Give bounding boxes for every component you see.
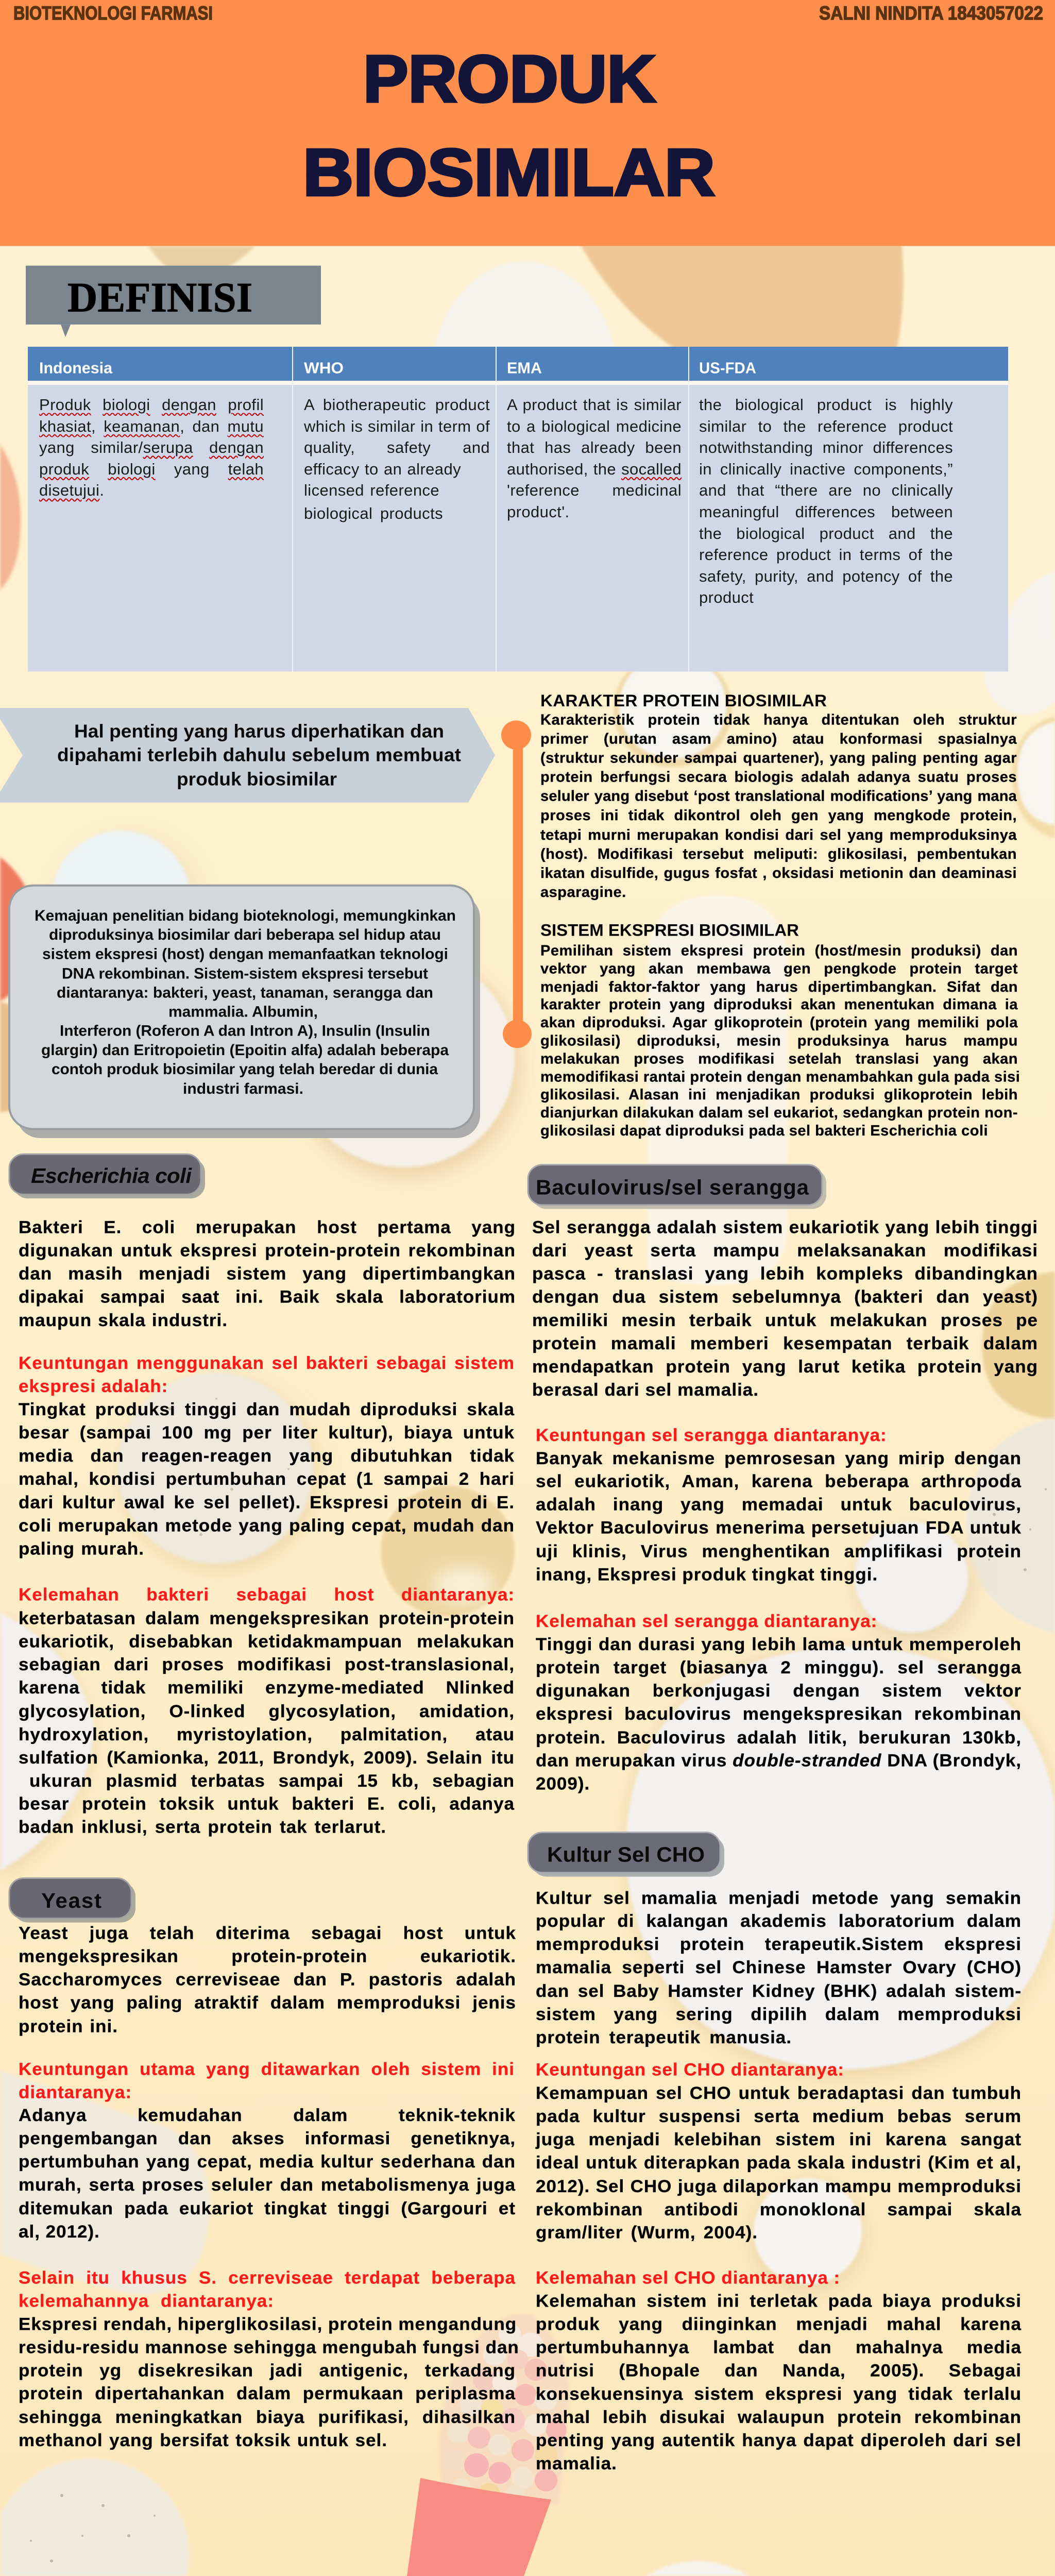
definition: EMA: A product that is similar [507,396,682,414]
pill: kultur sel CHO [528,1833,724,1877]
intro callout box: industri farmasi. [183,1081,303,1097]
text: sistem ekspresi biosimilar: melakukan proses modifikasi setelah translasi yang akan [540,1051,1018,1067]
text: kelemahan bakteri: sulfation (Kamionka, 2011, Brondyk, 2009). Selain itu [19,1748,515,1768]
text: baculovirus intro: memiliki mesin terbaik untuk melakukan proses pe [532,1311,1038,1330]
heading: keuntungan sel bakteri: ekspresi adalah: [19,1377,168,1396]
text: karakter protein biosimilar: proses ini tidak dikontrol oleh gen yang mengkode protein, [540,808,1017,824]
definition: WHO: which is similar in term of [304,417,490,435]
pill: baculovirus: Baculovirus/sel serangga [536,1175,809,1199]
text: keuntungan sel serangga: Banyak mekanisme pemrosesan yang mirip dengan [536,1449,1022,1468]
intro callout box: Kemajuan penelitian bidang bioteknologi, memungkinkan [35,908,456,924]
heading: keuntungan sel serangga: Keuntungan sel serangga diantaranya: [536,1426,887,1445]
text: keuntungan sel bakteri: paling murah. [19,1539,144,1558]
text: keuntungan yeast: pertumbuhan yang cepat, media kultur sederhana dan [19,2152,516,2172]
text: sistem ekspresi biosimilar: karakter protein yang diproduksi akan menentukan dimana ia [540,997,1018,1013]
text: karakter protein biosimilar: tetapi murni merupakan kondisi dari sel yang memproduksinya [540,827,1017,843]
arrow banner: dipahami terlebih dahulu sebelum membuat [57,744,461,765]
heading: keuntungan yeast: Keuntungan utama yang ditawarkan oleh sistem ini [19,2059,515,2079]
definition: US-FDA: safety, purity, and potency of the [699,567,953,585]
definition: US-FDA: and that “there are no clinically [699,482,953,499]
text: keuntungan yeast: ditemukan pada eukariot tingkat tinggi (Gargouri et [19,2198,516,2218]
text: sistem ekspresi biosimilar [540,943,1020,1139]
text: kelemahan sel CHO: konsekuensinya sistem ekspresi yang tidak terlalu [536,2384,1022,2404]
heading: karakter protein: KARAKTER PROTEIN BIOSIMILAR [540,691,827,710]
text: yeast intro [19,1923,516,2036]
text: kelemahan bakteri: keterbatasan dalam mengekspresikan protein-protein [19,1608,515,1628]
text: karakter protein biosimilar: primer (urutan asam amino) atau konformasi spasialnya [540,731,1017,747]
text: kultur sel CHO intro: sistem yang sering dipilih dalam memproduksi [536,2004,1022,2024]
intro callout box: glargin) dan Eritropoietin (Epoitin alfa) adalah beberapa [41,1042,449,1059]
pill: kultur sel CHO: Kultur Sel CHO [547,1842,705,1866]
text: yeast intro: Saccharomyces cerreviseae dan P. pastoris adalah [19,1970,516,1990]
text: kelemahan sel CHO [536,2290,1022,2476]
definition: Indonesia: disetujui. [39,482,104,499]
definition: EMA: product'. [507,503,570,521]
definition: US-FDA: meaningful differences between [699,503,953,521]
text: kelemahan sel serangga: protein. Baculovirus adalah litik, berukuran 130kb, [536,1727,1022,1747]
heading: kelemahan yeast: kelemahannya diantaranya: [19,2291,274,2311]
definition: Indonesia: yang similar/serupa dengan [39,439,264,456]
definisi callout heading [26,266,321,337]
text: kelemahan sel CHO: penting yang autentik hanya dapat diperoleh dari sel [536,2431,1022,2450]
text: kelemahan bakteri: sebagian dari proses modifikasi post-translasional, [19,1655,515,1674]
timeline connector [501,720,532,1048]
definition: WHO: quality, safety and [304,439,490,456]
definition: US-FDA: notwithstanding minor differences [699,439,953,456]
text: keuntungan sel serangga: adalah inang yang memadai untuk baculovirus, [536,1495,1022,1515]
text: kelemahan sel CHO: Kelemahan sistem ini terletak pada biaya produksi [536,2291,1022,2311]
text: keuntungan yeast: pengembangan dan akses informasi genetiknya, [19,2129,516,2148]
text: keuntungan sel CHO [536,2082,1022,2245]
definition: EMA: to a biological medicine [507,417,682,435]
table grid and column headers [28,347,1008,672]
text: e. coli intro: dipakai sampai saat ini. Baik skala laboratorium [19,1287,516,1307]
text: keuntungan yeast: murah, serta proses seluler dan metabolismenya juga [19,2175,516,2195]
definition: WHO [304,396,490,522]
text: karakter protein biosimilar: Karakteristik protein tidak hanya ditentukan oleh struktur [540,712,1017,728]
pill: yeast: Yeast [41,1889,101,1912]
arrow banner [0,708,495,803]
definition: EMA [507,396,682,521]
arrow banner: Hal penting yang harus diperhatikan dan [74,721,444,741]
text: kelemahan sel serangga: Tinggi dan durasi yang lebih lama untuk memperoleh [536,1635,1022,1654]
definition: WHO: licensed reference [304,482,439,499]
text: kelemahan sel CHO: pertumbuhannya lambat dan mahalnya media [536,2337,1022,2358]
text: baculovirus intro [532,1216,1038,1402]
heading: kelemahan yeast [19,2266,516,2313]
heading: sistem ekspresi: SISTEM EKSPRESI BIOSIMILAR [540,921,799,939]
text: baculovirus intro: dari yeast serta mampu melaksanakan modifikasi [532,1241,1038,1260]
text: kelemahan sel CHO: mahal lebih disukai walaupun protein rekombinan [536,2408,1022,2427]
title line 2: BIOSIMILAR [303,135,715,209]
text: keuntungan sel serangga: inang, Ekspresi produk tingkat tinggi. [536,1565,878,1584]
text: baculovirus intro: mendapatkan protein yang larut ketika protein yang [532,1357,1038,1377]
text: sistem ekspresi biosimilar: akan diproduksi. Agar glikoprotein (protein yang memiliki pola [540,1015,1018,1031]
text: kultur sel CHO intro: mamalia seperti sel Chinese Hamster Ovary (CHO) [536,1958,1022,1977]
text: kultur sel CHO intro: protein terapeutik manusia. [536,2027,792,2047]
intro callout box: diantaranya: bakteri, yeast, tanaman, serangga dan [57,985,433,1001]
text: keuntungan sel CHO: pada kultur suspensi serta medium bebas serum [536,2107,1022,2126]
text: kelemahan sel serangga: dan merupakan virus double-stranded DNA (Brondyk, [536,1751,1022,1770]
text: kelemahan bakteri: glycosylation, O-linked glycosylation, amidation, [19,1701,515,1721]
text: kultur sel CHO intro: popular di kalangan akademis laboratorium dalam [536,1911,1022,1931]
text: baculovirus intro: dengan dua sistem sebelumnya (bakteri dan yeast) [532,1287,1038,1307]
text: kultur sel CHO intro: Kultur sel mamalia menjadi metode yang semakin [536,1888,1022,1908]
text: kelemahan bakteri: eukariotik, disebabkan ketidakmampuan melakukan [19,1632,515,1651]
title line 1: PRODUK [363,42,656,116]
text: kultur sel CHO intro [536,1887,1022,2049]
text: kelemahan yeast: protein yg disekresikan jadi antigenic, terkadang [19,2361,516,2380]
definition: EMA: authorised, the socalled [507,460,682,478]
text: kelemahan yeast: methanol yang bersifat toksik untuk sel. [19,2431,387,2450]
heading: kelemahan sel CHO: Kelemahan sel CHO diantaranya : [536,2268,840,2287]
pill: escherichia coli [9,1154,205,1198]
text: sistem ekspresi biosimilar: memodifikasi rantai protein dengan menambahkan gula pada sisi [540,1069,1020,1085]
heading: keuntungan sel bakteri [19,1353,515,1396]
definition: Indonesia: Produk biologi dengan profil [39,396,264,414]
text: keuntungan sel CHO: ideal untuk diterapkan pada skala industri (Kim et al, [536,2153,1022,2173]
text: kelemahan bakteri: karena tidak memiliki enzyme-mediated Nlinked [19,1678,515,1698]
text: baculovirus intro: pasca - translasi yang lebih kompleks dibandingkan [532,1264,1038,1284]
table grid and column headers: WHO [304,359,344,377]
text: kultur sel CHO intro: dan sel Baby Hamster Kidney (BHK) adalah sistem- [536,1981,1022,2001]
definition: US-FDA: product [699,589,754,606]
text: karakter protein biosimilar: seluler yang disebut ‘post translational modifications’ yang mana [540,789,1017,805]
capsule packet [407,2478,551,2576]
heading: keuntungan sel bakteri: Keuntungan menggunakan sel bakteri sebagai sistem [19,1353,515,1373]
text: kultur sel CHO intro: memproduksi protein terapeutik.Sistem ekspresi [536,1935,1022,1954]
text: kelemahan bakteri: hydroxylation, myristoylation, palmitation, atau [19,1724,515,1744]
intro callout box: contoh produk biosimilar yang telah beredar di dunia [52,1061,438,1078]
text: karakter protein biosimilar [540,712,1017,901]
text: karakter protein biosimilar: (host). Modifikasi tersebut meliputi: glikosilasi, pembentukan [540,846,1017,862]
text: keuntungan sel bakteri: Tingkat produksi tinggi dan mudah diproduksi skala [19,1400,515,1419]
intro callout box: diproduksinya biosimilar dari beberapa sel hidup atau [49,927,441,943]
text: kelemahan sel serangga: digunakan berkonjugasi dengan sistem vektor [536,1681,1022,1701]
capsule beads [439,2314,569,2505]
text: e. coli intro: digunakan untuk ekspresi protein-protein rekombinan [19,1241,516,1260]
text: kelemahan sel serangga: 2009). [536,1774,590,1793]
text: keuntungan sel serangga: sel eukariotik, Aman, karena beberapa arthropoda [536,1472,1022,1492]
text: kelemahan sel CHO: mamalia. [536,2454,617,2473]
definition: US-FDA: similar to the reference product [699,417,953,435]
definition: Indonesia: produk biologi yang telah [39,460,264,478]
definition table [28,347,1008,672]
text: keuntungan sel bakteri: dari kultur awal ke sel pellet). Ekspresi protein di E. [19,1493,515,1512]
text: baculovirus intro: Sel serangga adalah sistem eukariotik yang lebih tinggi [532,1217,1038,1237]
text: sistem ekspresi biosimilar: glikosilasi) diproduksi, mesin produksinya harus mampu [540,1033,1018,1049]
text: kelemahan bakteri: besar protein toksik untuk bakteri E. coli, adanya [19,1794,515,1814]
heading: keuntungan sel CHO: Keuntungan sel CHO diantaranya: [536,2060,844,2079]
heading: kelemahan sel serangga: Kelemahan sel serangga diantaranya: [536,1612,877,1631]
definition: US-FDA: the biological product is highly [699,396,953,414]
intro callout box [9,886,480,1138]
definition: WHO: efficacy to an already [304,460,461,478]
text: sistem ekspresi biosimilar: glikosilasi. Alasan ini menjadikan produksi glikoprotein lebih [540,1087,1018,1103]
text: karakter protein biosimilar: ikatan disulfide, gugus fosfat , oksidasi metionin dan deaminasi [540,865,1017,882]
text: keuntungan sel CHO: juga menjadi kelebihan sistem ini karena sangat [536,2130,1022,2149]
text: yeast intro: host yang paling atraktif dalam memproduksi jenis [19,1993,516,2013]
text: sistem ekspresi biosimilar: vektor yang akan membawa gen pengkode protein target [540,961,1018,977]
pill: baculovirus [528,1165,826,1209]
text: kelemahan yeast: sehingga meningkatkan biaya purifikasi, dihasilkan [19,2407,516,2427]
definition: US-FDA [699,396,953,606]
text: kelemahan sel serangga: protein target (biasanya 2 minggu). sel serangga [536,1658,1022,1677]
table grid and column headers: Indonesia [39,359,113,377]
intro callout box: sistem ekspresi (host) dengan memanfaatkan teknologi [42,946,448,962]
text: kelemahan yeast [19,2313,516,2452]
text: karakter protein biosimilar: (struktur sekunder sampai quartener), yang paling penting agar [540,750,1017,766]
text: kelemahan sel serangga: ekspresi baculovirus mengekspresikan rekombinan [536,1704,1022,1724]
text: sistem ekspresi biosimilar: Pemilihan sistem ekspresi protein (host/mesin produksi) dan [540,943,1018,959]
text: keuntungan sel CHO: 2012). Sel CHO juga dilaporkan mampu memproduksi [536,2176,1022,2196]
text: e. coli intro: dan masih menjadi sistem yang dipertimbangkan [19,1264,516,1284]
text: karakter protein biosimilar: asparagine. [540,885,626,901]
text: baculovirus intro: protein mamali memberi kesempatan terbaik dalam [532,1334,1038,1353]
text: keuntungan sel bakteri: media dan reagen-reagen yang dibutuhkan tidak [19,1446,515,1466]
text: keuntungan sel bakteri: mahal, kondisi pertumbuhan cepat (1 sampai 2 hari [19,1469,515,1489]
text: keuntungan yeast [19,2106,516,2241]
text: karakter protein biosimilar: protein berfungsi secara biologis adalah adanya suatu proses [540,769,1017,786]
text: keuntungan sel bakteri: coli merupakan metode yang paling cepat, mudah dan [19,1516,515,1535]
definition: US-FDA: reference product in terms of the [699,546,953,564]
table grid and column headers: US-FDA [699,359,756,377]
text: yeast intro: protein ini. [19,2016,118,2036]
text: kelemahan sel serangga [536,1633,1022,1795]
definition: EMA: that has already been [507,439,682,456]
intro callout box: DNA rekombinan. Sistem-sistem ekspresi tersebut [62,965,428,982]
heading: kelemahan bakteri: Kelemahan bakteri sebagai host diantaranya: [19,1585,515,1604]
text: sistem ekspresi biosimilar: glikosilasi dapat diproduksi pada sel bakteri Escherichia coli [540,1123,988,1139]
header banner [0,0,1055,246]
arrow banner: produk biosimilar [177,769,337,789]
definisi callout heading: DEFINISI [67,274,252,321]
intro callout box: Interferon (Roferon A dan Intron A), Insulin (Insulin [60,1023,430,1040]
pill: yeast [9,1878,135,1922]
text: e. coli intro [19,1217,516,1330]
table grid and column headers: EMA [507,359,542,377]
heading: keuntungan yeast [19,2059,515,2102]
heading: kelemahan yeast: Selain itu khusus S. cerreviseae terdapat beberapa [19,2268,516,2287]
text: kelemahan yeast: Ekspresi rendah, hiperglikosilasi, protein mengandung [19,2314,517,2334]
pill: escherichia coli: Escherichia coli [31,1164,192,1188]
text: keuntungan sel CHO: gram/liter (Wurm, 2004). [536,2223,758,2242]
text: kelemahan sel CHO: produk yang diinginkan menjadi mahal karena [536,2314,1022,2334]
heading: keuntungan yeast: diantaranya: [19,2082,132,2102]
text: kelemahan yeast: protein dipertahankan dalam permukaan periplasma [19,2384,516,2403]
definition: Indonesia: khasiat, keamanan, dan mutu [39,417,264,435]
text: yeast intro: Yeast juga telah diterima sebagai host untuk [19,1923,516,1943]
text: kelemahan sel CHO: nutrisi (Bhopale dan Nanda, 2005). Sebagai [536,2361,1022,2381]
text: sistem ekspresi biosimilar: menjadi faktor-faktor yang harus dipertimbangkan. Sifat dan [540,979,1018,995]
text: keuntungan sel serangga: Vektor Baculovirus menerima persetujuan FDA untuk [536,1518,1022,1538]
definition: US-FDA: the biological product and the [699,524,953,542]
text: e. coli intro: Bakteri E. coli merupakan host pertama yang [19,1217,516,1237]
text: keuntungan yeast: al, 2012). [19,2222,100,2241]
text: kelemahan bakteri: badan inklusi, serta protein tak terlarut. [19,1818,386,1837]
text: baculovirus intro: berasal dari sel mamalia. [532,1380,759,1400]
text: e. coli intro: maupun skala industri. [19,1311,228,1330]
definition: WHO: A biotherapeutic product [304,396,490,414]
definition: Indonesia [39,396,264,502]
text: yeast intro: mengekspresikan protein-protein eukariotik. [19,1946,516,1967]
text: keuntungan sel CHO: rekombinan antibodi monoklonal sampai skala [536,2199,1022,2219]
intro callout box: mammalia. Albumin, [168,1004,318,1020]
text: keuntungan sel bakteri: besar (sampai 100 mg per liter kultur), biaya untuk [19,1423,515,1443]
text: kelemahan bakteri: ukuran plasmid terbatas sampai 15 kb, sebagian [29,1771,515,1791]
text: keuntungan sel CHO: Kemampuan sel CHO untuk beradaptasi dan tumbuh [536,2083,1022,2103]
definition: US-FDA: in clinically inactive components,” [699,460,953,478]
definition: WHO: biological products [304,504,443,522]
text: keuntungan yeast: Adanya kemudahan dalam teknik-teknik [19,2106,516,2125]
course label: BIOTEKNOLOGI FARMASI [13,3,213,24]
text: keuntungan sel serangga [536,1447,1022,1586]
text: sistem ekspresi biosimilar: dianjurkan dilakukan dalam sel eukariot, sedangkan protein non- [540,1105,1018,1121]
text: kelemahan yeast: residu-residu mannose sehingga mengubah fungsi dan [19,2337,519,2357]
text: kelemahan bakteri [19,1608,515,1837]
text: keuntungan sel bakteri [19,1400,515,1558]
definition: EMA: 'reference medicinal [507,482,682,499]
text: keuntungan sel serangga: uji klinis, Virus menghentikan amplifikasi protein [536,1541,1022,1561]
